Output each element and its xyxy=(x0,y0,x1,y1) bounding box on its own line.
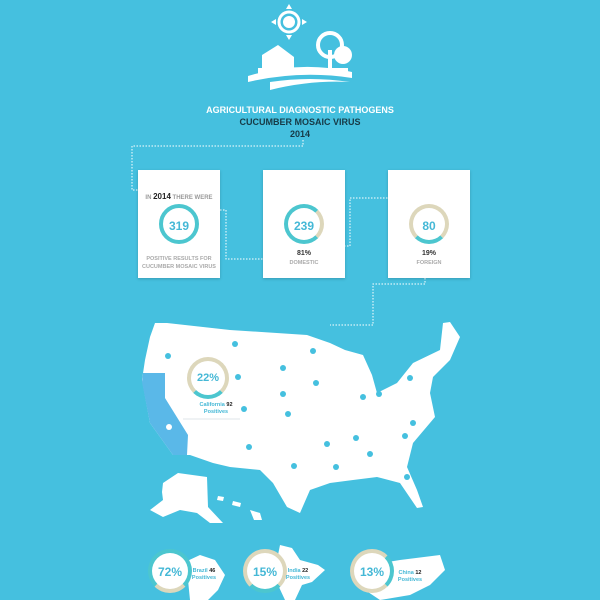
text: 22% xyxy=(197,372,219,384)
panel: domestic: DOMESTIC xyxy=(289,260,319,266)
panel: domestic: 81% xyxy=(297,250,311,257)
icon: farm scene xyxy=(248,4,352,90)
map: California highlight xyxy=(142,373,188,455)
text: Positives xyxy=(192,575,216,581)
text: 72% xyxy=(158,565,182,579)
title xyxy=(206,105,394,139)
title: CUCUMBER MOSAIC VIRUS xyxy=(239,117,360,127)
text: 13% xyxy=(360,565,384,579)
text: 15% xyxy=(253,565,277,579)
panel: total: CUCUMBER MOSAIC VIRUS xyxy=(142,264,216,270)
panel: foreign: 80 xyxy=(422,219,436,233)
text: Brazil 46 xyxy=(193,568,215,574)
text: Positives xyxy=(204,409,228,415)
callout: Brazil xyxy=(148,549,192,593)
callout: India xyxy=(243,549,287,593)
text: China 12 xyxy=(399,570,421,576)
text: Positives xyxy=(286,575,310,581)
title: AGRICULTURAL DIAGNOSTIC PATHOGENS xyxy=(206,105,394,115)
panel: foreign: FOREIGN xyxy=(416,260,442,266)
panel: total: POSITIVE RESULTS FOR xyxy=(146,256,212,262)
panel: foreign: 19% xyxy=(422,250,436,257)
panel: total xyxy=(138,170,220,278)
text: Positives xyxy=(398,577,422,583)
panel: foreign xyxy=(388,170,470,278)
title: 2014 xyxy=(290,129,310,139)
text: California 92 xyxy=(199,402,233,408)
panel: total: IN 2014 THERE WERE xyxy=(145,192,213,201)
text: India 22 xyxy=(288,568,308,574)
callout: California xyxy=(187,357,229,399)
panel: total: 319 xyxy=(169,219,189,233)
callout: China xyxy=(350,549,394,593)
panel: domestic: 239 xyxy=(294,219,314,233)
panel: domestic xyxy=(263,170,345,278)
